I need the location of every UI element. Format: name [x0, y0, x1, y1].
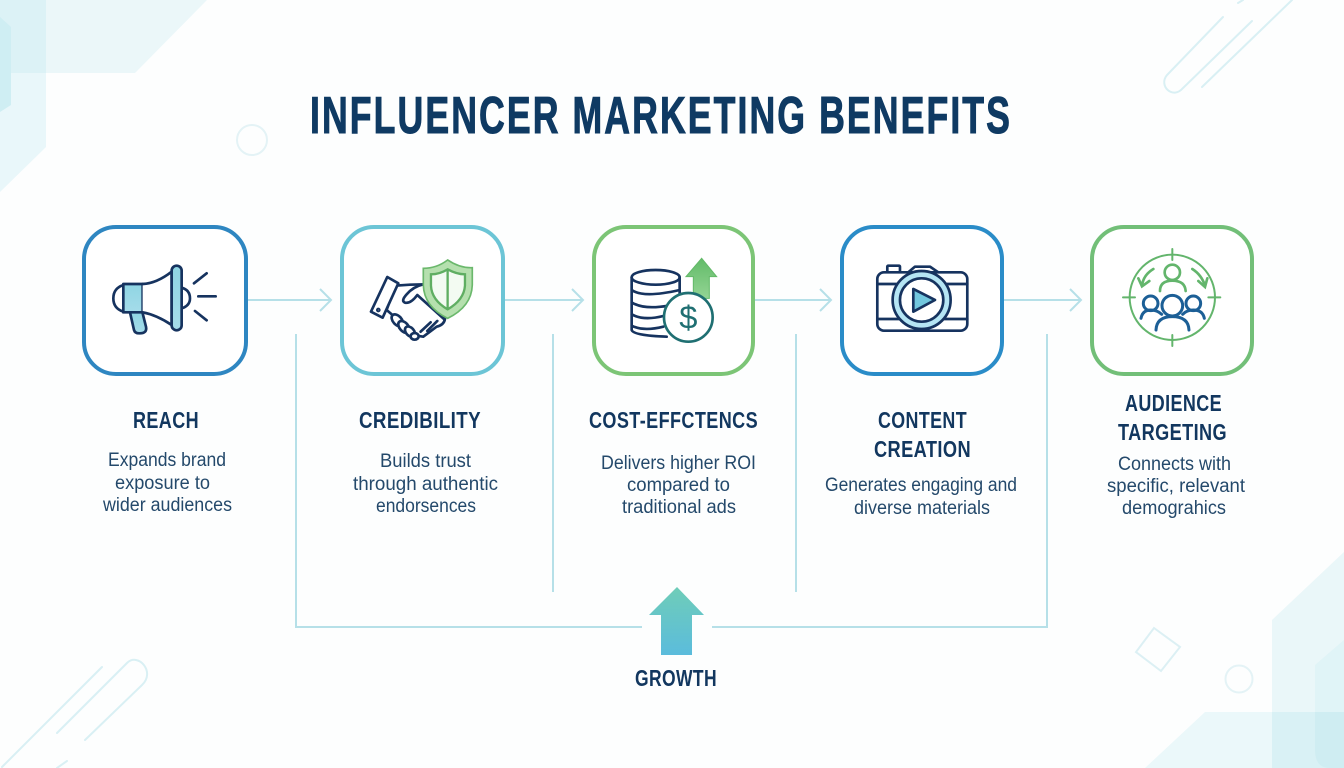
reach description: Expands brand — [108, 450, 226, 471]
content creation card — [842, 227, 1002, 374]
reach description: exposure to — [115, 473, 210, 494]
audience targeting description: demograhics — [1122, 498, 1226, 519]
content creation description: Generates engaging and — [825, 475, 1017, 496]
icon: megaphone — [113, 266, 216, 333]
content creation description — [825, 475, 1017, 519]
icon: coins with dollar and up arrow: $ — [679, 299, 697, 336]
reach description: wider audiences — [102, 495, 232, 516]
content creation heading — [874, 407, 971, 462]
audience targeting heading — [1118, 390, 1227, 445]
icon: coins with dollar and up arrow — [632, 258, 717, 342]
content creation heading: CONTENT — [878, 407, 967, 433]
credibility description: through authentic — [353, 474, 498, 495]
title: INFLUENCER MARKETING BENEFITS — [310, 87, 1012, 145]
credibility description — [353, 451, 498, 517]
audience targeting heading: TARGETING — [1118, 419, 1227, 445]
audience targeting heading: AUDIENCE — [1125, 390, 1222, 416]
growth connector lines — [296, 334, 1047, 627]
icon: handshake and shield — [371, 260, 472, 340]
audience targeting description: Connects with — [1118, 454, 1231, 475]
panel: content creation — [825, 227, 1017, 519]
arrow: content creation to audience targeting — [1004, 289, 1081, 311]
credibility description: endorsences — [376, 496, 476, 517]
background decoration: bottom-right shapes — [1136, 552, 1344, 768]
cost-effectiveness card — [594, 227, 753, 374]
cost-effectiveness description: Delivers higher ROI — [601, 453, 756, 474]
panel: credibility — [342, 227, 503, 517]
credibility card — [342, 227, 503, 374]
audience targeting card — [1092, 227, 1252, 374]
cost-effectiveness heading: COST-EFFCTENCS — [589, 407, 758, 433]
cost-effectiveness description: compared to — [627, 475, 730, 496]
growth label: GROWTH — [635, 665, 717, 691]
panel: reach — [84, 227, 246, 516]
reach description — [102, 450, 232, 516]
icon: camera with play button — [877, 266, 967, 331]
panel: audience targeting — [1092, 227, 1252, 519]
cost-effectiveness description — [601, 453, 756, 518]
arrow: reach to credibility — [248, 289, 331, 311]
content creation description: diverse materials — [854, 498, 990, 519]
panel: cost-effectiveness — [589, 227, 758, 518]
audience targeting description — [1107, 454, 1246, 519]
icon: target with audience — [1123, 249, 1220, 346]
credibility heading: CREDIBILITY — [359, 407, 481, 433]
arrow: cost-effectiveness to content creation — [755, 289, 831, 311]
content creation heading: CREATION — [874, 436, 971, 462]
audience targeting description: specific, relevant — [1107, 476, 1246, 497]
reach card — [84, 227, 246, 374]
background decoration: bottom-left lines — [2, 660, 147, 768]
background decoration: top-right lines — [1164, 0, 1292, 93]
arrow: growth up arrow — [649, 587, 704, 655]
reach heading: REACH — [133, 407, 199, 433]
background decoration: top-left shapes — [0, 0, 267, 192]
credibility description: Builds trust — [380, 451, 472, 472]
cost-effectiveness description: traditional ads — [622, 497, 736, 518]
arrow: credibility to cost-effectiveness — [505, 289, 583, 311]
